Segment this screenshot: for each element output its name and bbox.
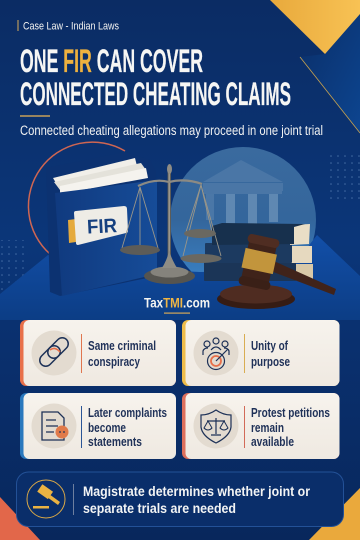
card: Same criminal conspiracy (20, 320, 176, 386)
card: Protest petitions remain available: available (251, 434, 294, 449)
title (20, 43, 291, 112)
title rule (20, 115, 50, 117)
card: Later complaints become statements: Later complaints (88, 405, 167, 420)
card: Unity of purpose (182, 320, 340, 386)
card: Protest petitions remain available: Protest petitions (251, 405, 330, 420)
title: ONE FIR CAN COVER (20, 43, 203, 79)
illustration: law books (204, 223, 313, 281)
card: Unity of purpose: Unity of (251, 338, 289, 353)
FIR label (74, 206, 128, 245)
illustration: scales of justice (120, 164, 222, 284)
FIR label: FIR (86, 215, 118, 239)
card: Protest petitions remain available (182, 393, 340, 459)
callout: magistrate determination: Magistrate determines whether joint or (83, 483, 310, 499)
corner decoration: top right (270, 0, 360, 133)
illustration: courthouse circle (170, 147, 316, 293)
card: Unity of purpose: purpose (251, 354, 290, 369)
icon: chain link (37, 335, 71, 369)
callout: magistrate determination (16, 472, 344, 526)
callout: magistrate determination: separate trials are needed (83, 500, 236, 516)
illustration: floor (0, 235, 360, 320)
card: Later complaints become statements (20, 393, 176, 459)
corner decoration: bottom left (0, 497, 40, 540)
icon: shield with scales (201, 410, 231, 443)
illustration: red arc (28, 142, 125, 254)
illustration: FIR folder (46, 152, 157, 296)
card: Protest petitions remain available: remain (251, 420, 284, 435)
icon: team and target (203, 338, 229, 370)
icon: gold gavel (27, 480, 65, 518)
card: Later complaints become statements: statements (88, 434, 142, 449)
kicker: Case Law - Indian Laws: Case Law - Indian Laws (23, 20, 119, 32)
dot patterns (0, 150, 360, 292)
corner decoration: bottom right (309, 488, 360, 540)
brand: TaxTMI.com: TaxTMI.com (144, 294, 210, 310)
card: Same criminal conspiracy: conspiracy (88, 354, 141, 369)
icon: document with speech bubble (42, 412, 68, 440)
card: Later complaints become statements: become (88, 420, 126, 435)
illustration: gavel (217, 233, 336, 309)
card: Same criminal conspiracy: Same criminal (88, 338, 156, 353)
